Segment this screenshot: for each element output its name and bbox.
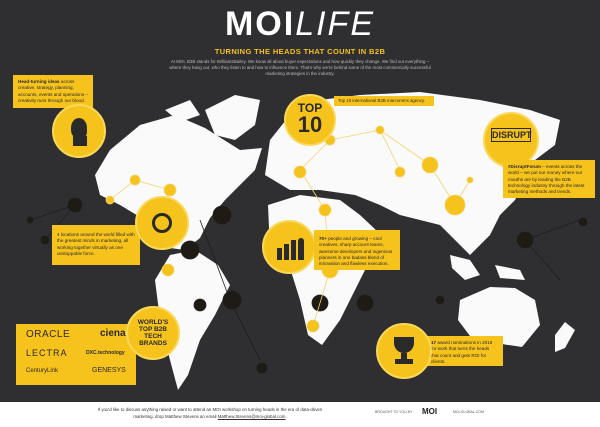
callout: awards: 17 award nominations in 2018 for work that turns the heads that count and gets ROI for clients.: [431, 340, 492, 364]
title: MOILIFE: [225, 5, 375, 43]
world's top b2b tech brands badge: TOP B2B: [139, 326, 167, 333]
callout: top 10: Top 10 international B2B marcomms agency.: [338, 98, 425, 103]
callout: 4 locations: 4 locations around the world filled with the greatest minds in marketing, all working together virtually as one unstoppable force.: [57, 232, 135, 256]
callout: top 10: [334, 96, 434, 106]
icon: head with gears: [52, 104, 106, 158]
southeast asia islands: [450, 255, 480, 280]
world's top b2b tech brands badge: WORLD'S: [138, 319, 168, 326]
intro paragraph: At MOI, B2B stands for Brilliant2Bailey. We know all about buyer expectations and how quickly they change. We find out everything – where they hang out, who they listen to and how to influence them. That's why we're behind some of the most commercially successful marketing strategies in the industry.: [169, 59, 431, 76]
brands panel: ciena: [100, 328, 126, 339]
callout: 4 locations: [52, 225, 140, 265]
callout: 70+ people: [314, 230, 400, 270]
callout: head-turning ideas: [13, 75, 93, 108]
icon: trophy: [376, 323, 432, 379]
south america: [155, 250, 230, 390]
icon: globe: [135, 196, 189, 250]
footer logo: BROUGHT TO YOU BY: [375, 410, 412, 414]
callout: head-turning ideas: Head-turning ideas across creative, strategy, planning, accounts, events and operations – creativity runs through our blood.: [18, 79, 88, 103]
disrupt badge: [483, 112, 539, 168]
new zealand: [555, 322, 575, 352]
greenland: [205, 95, 260, 140]
footer: [0, 402, 600, 427]
footer: MOI: [422, 407, 437, 416]
europe + asia: [265, 92, 560, 255]
australia: [458, 287, 540, 347]
disrupt badge: DISRUPT: [492, 130, 532, 140]
brands panel: DXC.technology: [86, 350, 125, 356]
brands panel: GENESYS: [92, 367, 126, 374]
icon: bar chart person: [262, 220, 316, 274]
brands panel: ORACLE: [26, 329, 70, 340]
brands panel: [16, 324, 136, 385]
north america: [95, 115, 262, 250]
callout: awards: [405, 336, 503, 366]
callout: 70+ people: 70+ people and growing – cool creatives, sharp account teams, awesome developers and ingenious planners in one badass blend of innovation and flawless execution.: [319, 236, 392, 266]
world's top b2b tech brands badge: BRANDS: [139, 340, 167, 347]
subtitle: TURNING THE HEADS THAT COUNT IN B2B: [215, 47, 385, 56]
footer text: If you'd like to discuss anything raised or want to attend an MOI workshop on turning heads in the era of data-driven marketing, drop Matthew Stevens an email Matthew.Stevens@moi-global.com.: [98, 407, 322, 418]
callout: disrupt forum: [503, 160, 595, 198]
callout: disrupt forum: #DisruptForum – events across the world – we put our money where our mouths are by leading the B2B technology industry through the latest marketing methods and trends.: [508, 164, 584, 194]
brands panel: LECTRA: [26, 348, 68, 358]
africa: [268, 195, 378, 345]
footer: MOI-GLOBAL.COM: [453, 410, 484, 414]
top 10 badge: TOP: [298, 101, 322, 115]
top 10 badge: 10: [298, 112, 322, 137]
brands panel: CenturyLink: [26, 368, 58, 374]
world's top b2b tech brands badge: [126, 306, 180, 360]
top 10 badge: [284, 94, 336, 146]
world's top b2b tech brands badge: TECH: [144, 333, 162, 340]
